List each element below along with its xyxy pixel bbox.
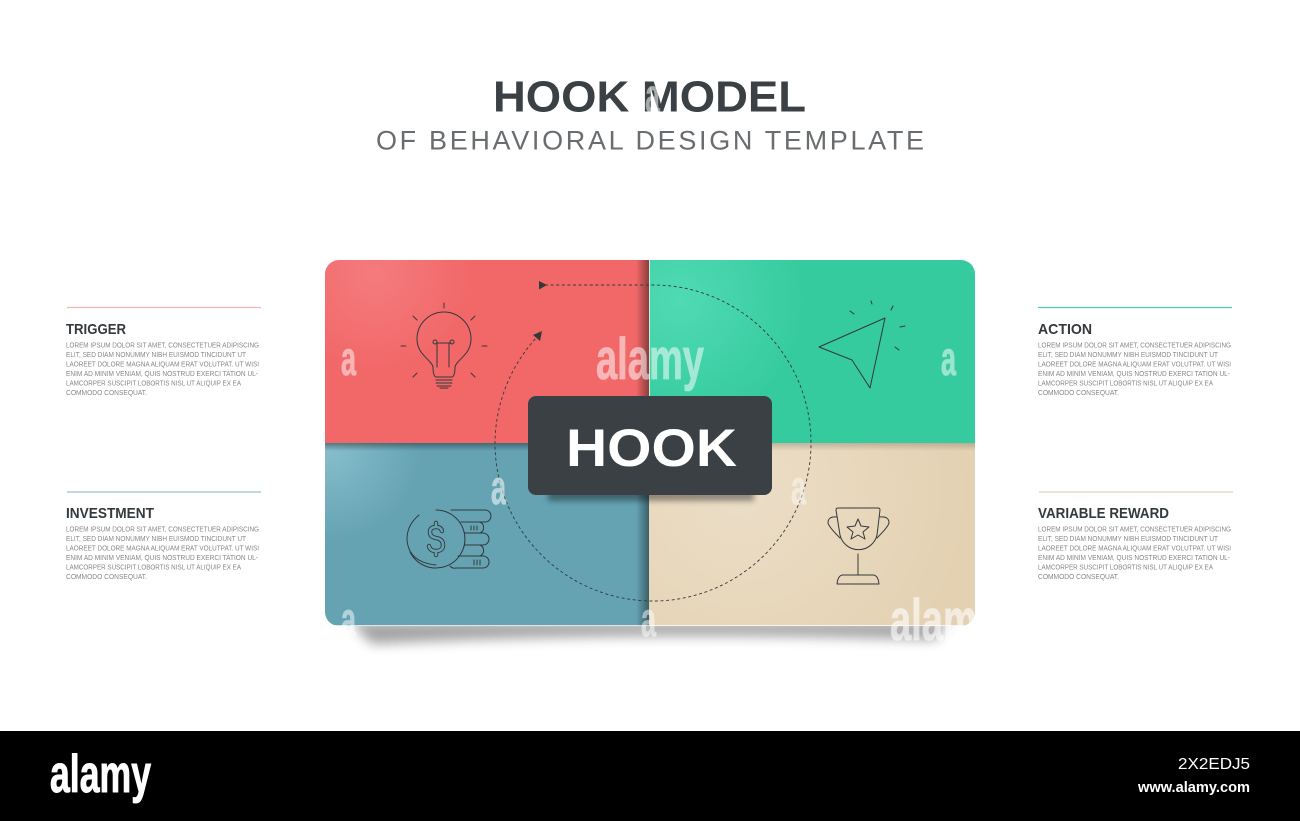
footer bar (0, 731, 1300, 821)
dashed cycle arrow (495, 281, 811, 601)
text block: trigger: LAMCORPER SUSCIPIT LOBORTIS NISL UT ALIQUIP EX EA (66, 380, 241, 388)
icon: trophy (828, 508, 889, 584)
arrowhead: top (539, 281, 547, 290)
text block: action: COMMODO CONSEQUAT. (1038, 390, 1119, 397)
icon: cursor arrow (819, 301, 905, 388)
text block: variable reward: ELIT, SED DIAM NONUMMY NIBH EUISMOD TINCIDUNT UT (1038, 536, 1219, 543)
text block: action: ACTION (1038, 321, 1092, 338)
panel shadow (350, 622, 950, 644)
text block: variable reward: LAOREET DOLORE MAGNA ALIQUAM ERAT VOLUTPAT. UT WISI (1038, 546, 1231, 552)
watermark letters: alamy (890, 588, 998, 653)
panel: variable reward (649, 443, 975, 626)
text block: investment: COMMODO CONSEQUAT. (66, 574, 147, 581)
text block: investment: LAOREET DOLORE MAGNA ALIQUAM ERAT VOLUTPAT. UT WISI (66, 546, 259, 552)
panel: investment (325, 443, 650, 626)
image id: 2X2EDJ5 (1178, 756, 1250, 773)
footer logo: alamy (50, 745, 151, 804)
text block: variable reward: LAMCORPER SUSCIPIT LOBORTIS NISL UT ALIQUIP EX EA (1038, 564, 1213, 572)
text block: action (1038, 308, 1232, 397)
text block: action: LAOREET DOLORE MAGNA ALIQUAM ERAT VOLUTPAT. UT WISI (1038, 362, 1231, 368)
arrowhead: left (533, 331, 542, 341)
text block: variable reward: LOREM IPSUM DOLOR SIT AMET, CONSECTETUER ADIPISCING (1038, 526, 1231, 534)
text block: investment: ELIT, SED DIAM NONUMMY NIBH EUISMOD TINCIDUNT UT (66, 536, 247, 543)
hook label: HOOK (566, 419, 737, 478)
panel: trigger (325, 260, 650, 444)
text block: investment: INVESTMENT (66, 505, 154, 522)
text block: trigger: ELIT, SED DIAM NONUMMY NIBH EUISMOD TINCIDUNT UT (66, 352, 247, 359)
text block: trigger: TRIGGER (66, 321, 126, 338)
text block: variable reward: COMMODO CONSEQUAT. (1038, 574, 1119, 581)
panel: action (649, 260, 975, 444)
icon: coins with dollar (407, 510, 491, 568)
text block: trigger: LAOREET DOLORE MAGNA ALIQUAM ERAT VOLUTPAT. UT WISI (66, 362, 259, 368)
text block: action: LOREM IPSUM DOLOR SIT AMET, CONSECTETUER ADIPISCING (1038, 342, 1231, 350)
text block: investment: LOREM IPSUM DOLOR SIT AMET, CONSECTETUER ADIPISCING (66, 526, 259, 534)
text block: investment: ENIM AD MINIM VENIAM, QUIS NOSTRUD EXERCI TATION UL- (66, 555, 259, 562)
watermark letters: alamy (596, 327, 704, 392)
watermark letters: a (491, 462, 506, 515)
watermark on title: a (645, 70, 660, 123)
footer url: www.alamy.com (1137, 779, 1250, 796)
text block: variable reward: VARIABLE REWARD (1038, 505, 1169, 522)
subtitle: OF BEHAVIORAL DESIGN TEMPLATE (376, 126, 924, 156)
panel: quadrant grid (325, 260, 975, 626)
watermark letters: a (641, 594, 656, 647)
watermark letters: a (791, 462, 806, 515)
main heading: HOOK MODEL (493, 72, 806, 122)
watermark letters: a (341, 594, 356, 647)
text block: trigger: COMMODO CONSEQUAT. (66, 390, 147, 397)
text block: action: ENIM AD MINIM VENIAM, QUIS NOSTRUD EXERCI TATION UL- (1038, 371, 1231, 378)
hook label shadow (548, 490, 754, 501)
text block: variable reward: ENIM AD MINIM VENIAM, QUIS NOSTRUD EXERCI TATION UL- (1038, 555, 1231, 562)
watermark letters: a (941, 333, 956, 386)
text block: variable reward (1038, 492, 1233, 581)
text block: investment: LAMCORPER SUSCIPIT LOBORTIS NISL UT ALIQUIP EX EA (66, 564, 241, 572)
text block: action: ELIT, SED DIAM NONUMMY NIBH EUISMOD TINCIDUNT UT (1038, 352, 1219, 359)
watermark letters (341, 327, 998, 653)
title (376, 70, 924, 156)
watermark letters: a (341, 333, 356, 386)
icon: light bulb (401, 303, 487, 388)
text block: investment (66, 492, 261, 581)
hook label (528, 396, 772, 495)
text block: trigger (66, 308, 261, 397)
text block: trigger: ENIM AD MINIM VENIAM, QUIS NOSTRUD EXERCI TATION UL- (66, 371, 259, 378)
text block: trigger: LOREM IPSUM DOLOR SIT AMET, CONSECTETUER ADIPISCING (66, 342, 259, 350)
text block: action: LAMCORPER SUSCIPIT LOBORTIS NISL UT ALIQUIP EX EA (1038, 380, 1213, 388)
